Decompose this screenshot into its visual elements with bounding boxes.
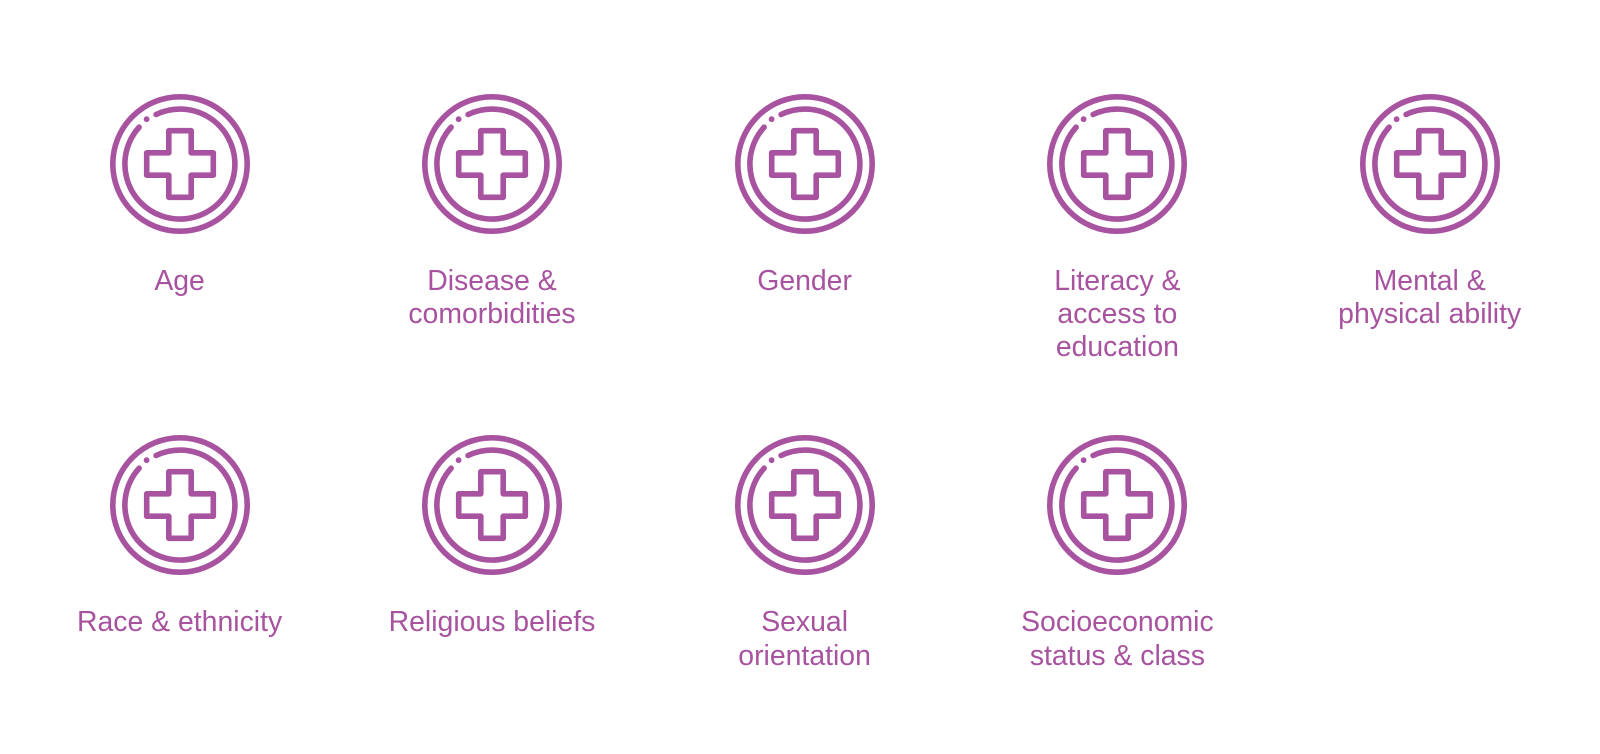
label: Socioeconomic status & class: status & class bbox=[1030, 640, 1205, 672]
item: Age bbox=[110, 94, 250, 297]
icon: medical cross bbox=[735, 94, 875, 234]
label: Mental & physical ability: Mental & bbox=[1374, 265, 1486, 297]
icon: medical cross bbox=[1360, 94, 1500, 234]
label: Race & ethnicity: Race & ethnicity bbox=[77, 606, 282, 638]
icon: medical cross bbox=[422, 435, 562, 575]
label: Sexual orientation bbox=[738, 606, 871, 672]
label: Sexual orientation: Sexual bbox=[761, 606, 848, 638]
icon: medical cross bbox=[422, 94, 562, 234]
item: Literacy & access to education bbox=[1047, 94, 1187, 363]
label: Mental & physical ability: physical ability bbox=[1338, 298, 1521, 330]
label: Sexual orientation: orientation bbox=[738, 640, 871, 672]
label: Disease & comorbidities: comorbidities bbox=[408, 298, 576, 330]
icon: medical cross bbox=[1047, 94, 1187, 234]
label: Religious beliefs: Religious beliefs bbox=[389, 606, 595, 638]
item: Mental & physical ability bbox=[1338, 94, 1522, 330]
label: Gender: Gender bbox=[757, 265, 852, 297]
icon: medical cross bbox=[110, 435, 250, 575]
label: Literacy & access to education bbox=[1054, 265, 1180, 363]
label: Literacy & access to education: access to bbox=[1057, 298, 1177, 330]
item: Religious beliefs bbox=[389, 435, 595, 638]
label: Literacy & access to education: Literacy & bbox=[1054, 265, 1180, 297]
item: Socioeconomic status & class bbox=[1021, 435, 1214, 672]
icon: medical cross bbox=[735, 435, 875, 575]
item: Race & ethnicity bbox=[77, 435, 282, 638]
label: Age: Age bbox=[154, 265, 205, 297]
label: Socioeconomic status & class: Socioeconomic bbox=[1021, 606, 1214, 638]
item: Disease & comorbidities bbox=[408, 94, 576, 330]
label: Disease & comorbidities: Disease & bbox=[427, 265, 557, 297]
label: Disease & comorbidities bbox=[408, 265, 576, 330]
item: Sexual orientation bbox=[735, 435, 875, 672]
label: Literacy & access to education: education bbox=[1056, 331, 1179, 363]
icon: medical cross bbox=[110, 94, 250, 234]
item: Gender bbox=[735, 94, 875, 297]
icon: medical cross bbox=[1047, 435, 1187, 575]
label: Socioeconomic status & class bbox=[1021, 606, 1214, 672]
label: Mental & physical ability bbox=[1338, 265, 1522, 330]
